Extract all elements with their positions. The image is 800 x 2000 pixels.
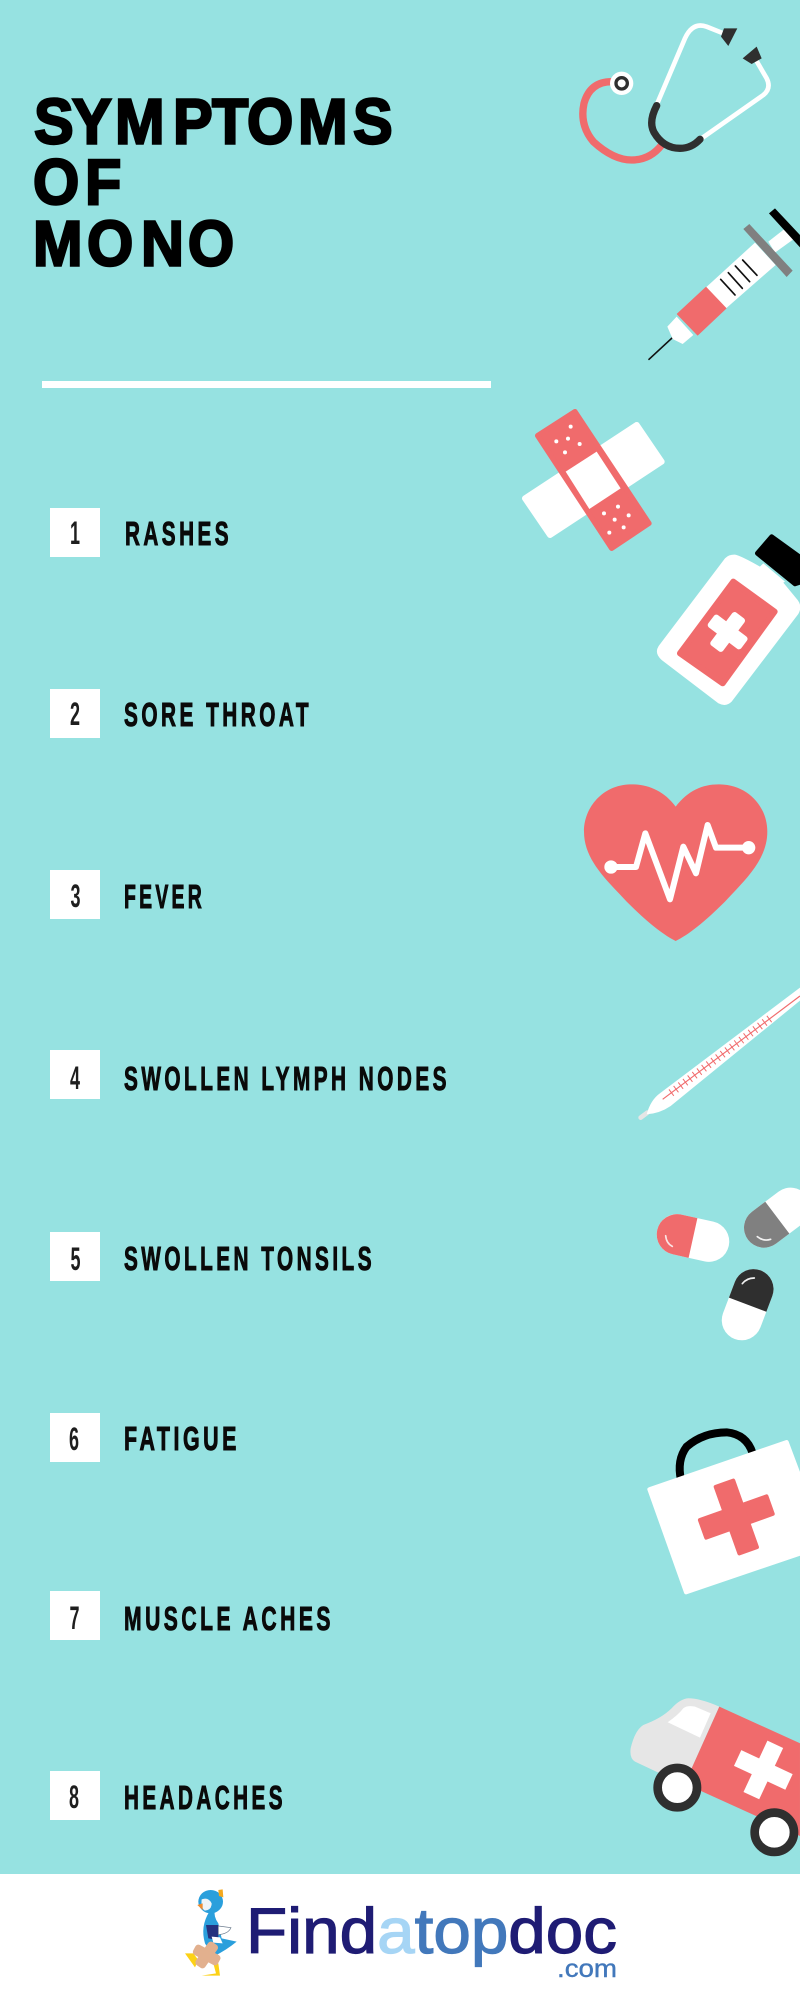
black pill — [716, 1263, 779, 1346]
item 2: sore throat: SORE THROAT — [124, 696, 312, 733]
item 7: muscle aches: MUSCLE ACHES — [124, 1600, 334, 1637]
icon: duck mascot — [185, 1889, 237, 1976]
logo domain: .com — [557, 1955, 617, 1983]
logo wordmark: Findatopdoc — [246, 1895, 617, 1967]
item 4: swollen lymph nodes — [50, 1050, 450, 1099]
item 6: fatigue: 6 — [69, 1421, 79, 1457]
item 2: sore throat — [50, 689, 312, 738]
title — [33, 87, 393, 280]
gray pill — [736, 1180, 800, 1256]
icon: stethoscope — [583, 26, 769, 160]
item 4: swollen lymph nodes: 4 — [70, 1060, 80, 1096]
icon: first aid kit — [649, 1432, 800, 1592]
item 7: muscle aches — [50, 1591, 334, 1640]
item 7: muscle aches: 7 — [70, 1600, 80, 1636]
icon: bandage — [525, 412, 662, 548]
red pill — [653, 1210, 733, 1266]
item 3: fever: 3 — [70, 878, 80, 914]
item 2: sore throat: 2 — [70, 696, 80, 732]
title: MONO — [33, 209, 234, 280]
item 8: headaches: HEADACHES — [124, 1779, 286, 1816]
item 8: headaches — [50, 1771, 286, 1820]
icon: pills — [653, 1180, 800, 1346]
item 3: fever: FEVER — [124, 878, 205, 915]
item 1: rashes: 1 — [70, 515, 80, 551]
item 5: swollen tonsils: SWOLLEN TONSILS — [124, 1240, 375, 1277]
symptom list — [50, 508, 450, 1820]
item 3: fever — [50, 870, 205, 919]
item 1: rashes: RASHES — [125, 515, 232, 552]
panel: white footer — [0, 1874, 800, 2000]
logo: Findatopdoc.com — [246, 1895, 617, 1983]
title underline — [42, 381, 491, 388]
icon: ambulance — [630, 1698, 800, 1852]
item 8: headaches: 8 — [69, 1779, 79, 1815]
item 1: rashes — [50, 508, 232, 557]
title: SYMPTOMS — [34, 87, 393, 158]
icon: syringe — [649, 208, 800, 359]
item 5: swollen tonsils — [50, 1232, 375, 1281]
item 5: swollen tonsils: 5 — [70, 1241, 80, 1277]
title: OF — [33, 147, 121, 218]
item 6: fatigue: FATIGUE — [124, 1420, 240, 1457]
item 4: swollen lymph nodes: SWOLLEN LYMPH NODES — [124, 1060, 450, 1097]
icon: medicine bottle — [657, 537, 800, 705]
item 6: fatigue — [50, 1413, 240, 1462]
icon: thermometer — [641, 988, 800, 1118]
icon: heart with pulse — [584, 784, 767, 941]
